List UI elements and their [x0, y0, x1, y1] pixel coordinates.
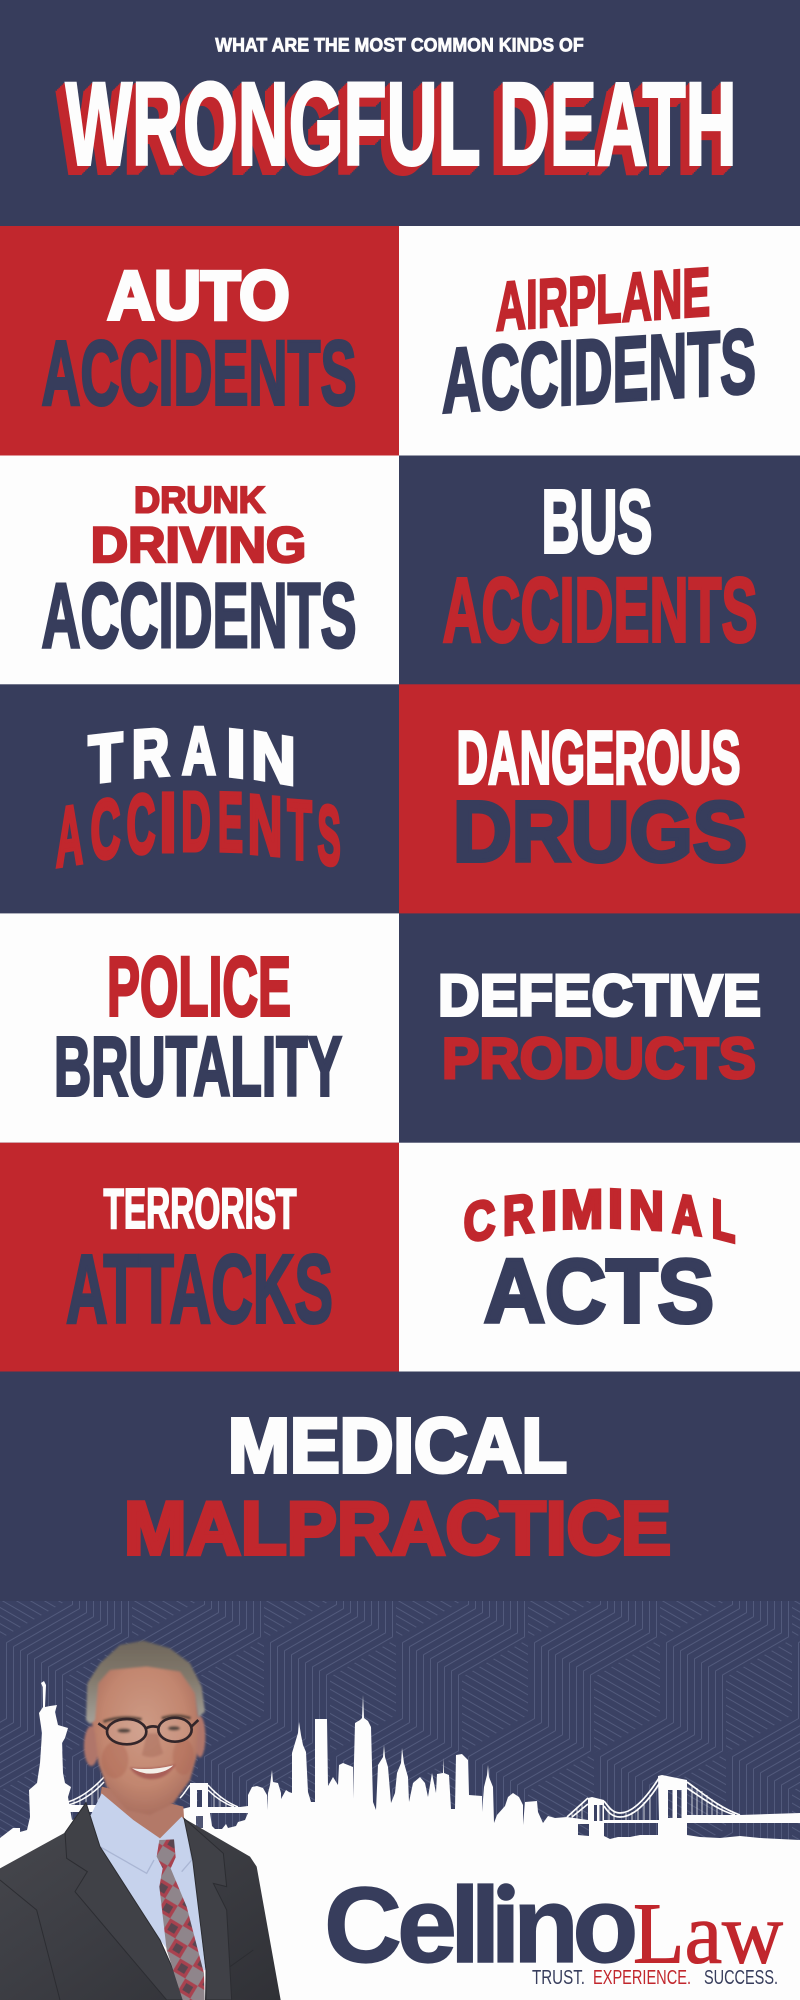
- label: accidents (arched): E: [218, 775, 243, 869]
- panel: auto accidents: [0, 226, 399, 456]
- label: train (arched): R: [132, 714, 169, 792]
- head: [84, 1641, 205, 1815]
- suit jacket: [0, 1803, 281, 2000]
- label: accidents (arched): D: [181, 776, 211, 870]
- label: criminal (arched): C: [464, 1189, 495, 1254]
- lapels: [65, 1803, 232, 2000]
- label: accidents (arched): C: [127, 775, 155, 872]
- wordmark: Law: Law: [633, 1885, 783, 1982]
- label: brutality: BRUTALITY: [54, 1020, 342, 1114]
- geometric line pattern background: [0, 1601, 800, 2000]
- necktie: [157, 1839, 205, 2000]
- label: accidents: ACCIDENTS: [42, 565, 356, 667]
- label: products: PRODUCTS: [442, 1027, 756, 1091]
- neck: [100, 1787, 185, 1842]
- panel: page header: [0, 0, 800, 226]
- label: drunk: DRUNK: [134, 479, 265, 521]
- wordmark: Cellino: Cellino: [324, 1864, 638, 1985]
- teeth: [132, 1765, 173, 1774]
- label: train (arched): N: [251, 717, 296, 800]
- right bridges cables: [567, 1778, 740, 1817]
- panel: terrorist attacks: [0, 1143, 399, 1372]
- panel: footer with skyline, portrait and logo: [0, 1601, 800, 2000]
- label: train (arched): I: [226, 715, 246, 792]
- heading: what are the most common kinds of: WHAT ARE THE MOST COMMON KINDS OF: [215, 35, 584, 57]
- panel: criminal acts: [399, 1143, 800, 1372]
- tagline: trust experience success: [532, 1967, 778, 1989]
- nose shadow: [142, 1733, 163, 1757]
- eyebrows: [103, 1716, 191, 1722]
- label: medical: MEDICAL: [228, 1403, 567, 1489]
- panel: airplane accidents: [399, 226, 800, 456]
- label: defective: DEFECTIVE: [438, 964, 761, 1028]
- panel: drunk driving accidents: [0, 456, 399, 684]
- face: [90, 1662, 198, 1815]
- suit shadow seam: [0, 1880, 253, 2000]
- label: train (arched): [89, 714, 296, 800]
- label: bus: BUS: [542, 472, 652, 572]
- hair: [86, 1641, 205, 1724]
- label: terrorist: TERRORIST: [104, 1178, 297, 1241]
- label: drugs: DRUGS: [453, 784, 747, 880]
- left bridge deck and cables: [68, 1777, 740, 1820]
- label: criminal (arched): I: [608, 1178, 623, 1240]
- tagline: trust experience success: TRUST.: [532, 1967, 585, 1989]
- label: criminal (arched): A: [672, 1183, 702, 1248]
- label: acts: ACTS: [484, 1241, 714, 1342]
- label: attacks: ATTACKS: [66, 1234, 333, 1344]
- panel: defective products: [399, 913, 800, 1143]
- label: train (arched): T: [89, 719, 123, 798]
- collar shading: [100, 1823, 192, 1873]
- illustration: New York skyline silhouette: [0, 1681, 800, 2000]
- label: auto: AUTO: [108, 258, 290, 334]
- label: accidents (arched): A: [56, 787, 83, 885]
- smile: [129, 1764, 176, 1779]
- eyes: [117, 1728, 131, 1733]
- cheek flush: [102, 1742, 128, 1778]
- label: accidents (arched): I: [159, 775, 177, 869]
- label: criminal (arched): [464, 1178, 735, 1255]
- round dot of the letter i: [494, 1878, 518, 1902]
- logo: Cellino Law: [324, 1864, 783, 1989]
- label: criminal (arched): R: [503, 1184, 534, 1247]
- label: criminal (arched): M: [561, 1179, 603, 1241]
- tagline: trust experience success: EXPERIENCE.: [593, 1967, 691, 1989]
- label: criminal (arched): I: [541, 1181, 557, 1243]
- label: accidents (arched): [56, 775, 341, 885]
- label: accidents (arched): T: [287, 782, 312, 878]
- label: accidents: ACCIDENTS: [42, 322, 356, 424]
- label: accidents (arched): C: [90, 782, 121, 879]
- panel: medical malpractice: [0, 1372, 800, 1601]
- panel: police brutality: [0, 913, 399, 1143]
- panel: dangerous drugs: [399, 684, 800, 914]
- label: malpractice: MALPRACTICE: [124, 1487, 671, 1571]
- label: accidents (arched): N: [248, 777, 282, 874]
- glasses: [98, 1718, 198, 1744]
- label: criminal (arched): N: [629, 1179, 664, 1242]
- label: criminal (arched): L: [712, 1189, 735, 1255]
- panel: bus accidents: [399, 456, 800, 684]
- label: driving: DRIVING: [91, 517, 306, 573]
- label: train (arched): A: [182, 715, 216, 789]
- gaps below decks and tower arches: [604, 1823, 658, 1839]
- panel: train accidents: [0, 684, 399, 914]
- label: police: POLICE: [107, 940, 291, 1034]
- portrait: smiling man in dark suit: [0, 1641, 281, 2000]
- label: accidents (arched): S: [317, 787, 341, 885]
- shirt: [90, 1793, 206, 1973]
